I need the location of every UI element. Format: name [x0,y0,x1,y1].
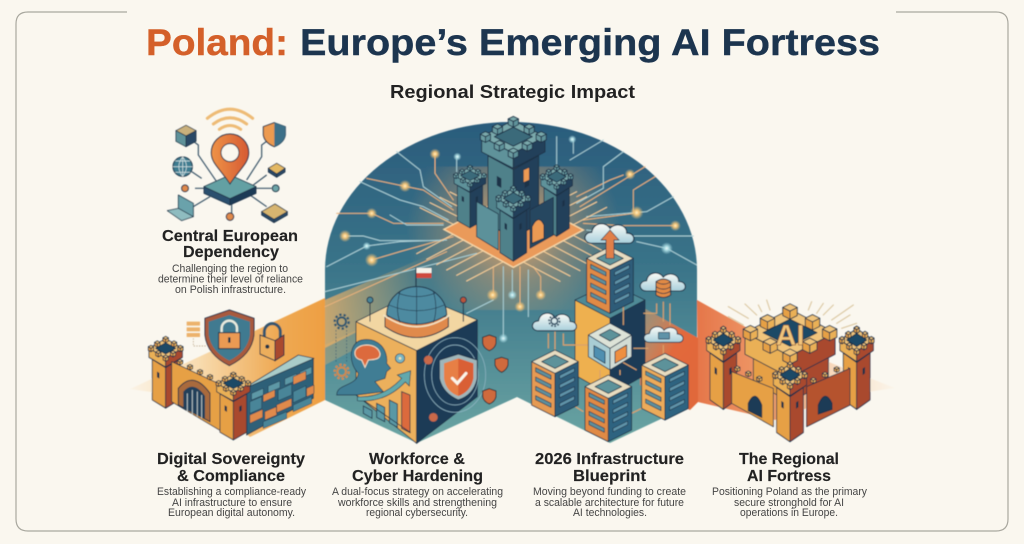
regional AI fortress [706,300,874,442]
rear pedestal [575,283,645,395]
text: Digital Sovereignty & Compliance: Digital Sovereignty [157,451,305,468]
shield with check [439,354,477,400]
rays [728,300,857,328]
workforce and cyber hardening cube [335,287,508,443]
text: The Regional AI Fortress: operations in Europe. [740,507,838,519]
text: Central European Dependency: Dependency [183,244,279,261]
text: Central European Dependency [158,228,303,296]
gate arches [748,396,762,417]
laptop [167,195,193,221]
chip node [268,163,285,177]
top server [587,247,633,313]
text: 2026 Infrastructure Blueprint [533,451,686,519]
icon: blue fortress [454,116,573,261]
text: Digital Sovereignty & Compliance: Establishing a compliance-ready [157,486,307,498]
text: Central European Dependency: Central European [162,228,298,245]
icon: location pin [211,134,249,184]
central dependency network icon [167,109,287,223]
processor chip [588,323,632,370]
text: Digital Sovereignty & Compliance [157,451,307,519]
dotted connector [193,338,206,346]
text: Central European Dependency: Challenging the region to [172,263,288,275]
circuit traces and castle [325,116,697,343]
text: Central European Dependency: on Polish infrastructure. [175,284,286,296]
brain [355,345,380,367]
small nodes [182,185,279,220]
shield node [263,123,285,147]
text: The Regional AI Fortress: The Regional [739,451,839,468]
text: 2026 Infrastructure Blueprint: a scalable architecture for future [535,497,684,509]
text: Digital Sovereignty & Compliance: & Compliance [177,468,285,485]
infrastructure blueprint stack [532,224,688,442]
curtain walls [732,372,773,427]
text: Digital Sovereignty & Compliance: AI infrastructure to ensure [172,497,292,509]
central dome panel [325,122,698,443]
gears [335,315,349,379]
text: Workforce & Cyber Hardening: Cyber Hardening [352,468,483,485]
text: 2026 Infrastructure Blueprint: Blueprint [573,468,646,485]
text: The Regional AI Fortress: Positioning Poland as the primary [712,486,868,498]
cube faces [356,293,477,443]
network lines [192,140,272,213]
glow under castle [325,167,697,310]
light rays from the diamond [417,192,610,281]
illustration [130,109,895,443]
text: Central European Dependency: determine their level of reliance [158,274,303,286]
globe node [173,157,192,176]
text: Workforce & Cyber Hardening: workforce skills and strengthening [337,497,497,509]
head silhouette [337,339,391,395]
signal arcs [207,109,253,129]
antennas [367,297,466,322]
icon: Poland flag [416,268,432,290]
trace nodes [339,135,681,343]
right orange band [697,300,895,420]
text: Digital Sovereignty & Compliance: European digital autonomy. [168,507,295,519]
diamond base [444,193,583,267]
text: Workforce & Cyber Hardening: A dual-focus strategy on accelerating [332,486,503,498]
text: Workforce & Cyber Hardening: regional cybersecurity. [366,507,468,519]
hub [204,175,256,205]
subtitle: Regional Strategic Impact [390,82,635,102]
text: 2026 Infrastructure Blueprint: AI technologies. [573,507,647,519]
data stack [187,322,200,337]
text: The Regional AI Fortress [712,451,868,519]
title: Europe’s Emerging AI Fortress [300,22,880,63]
small shields and threats [424,335,508,422]
padlock [260,324,284,361]
brick wall [247,355,314,435]
circuit traces [325,137,697,337]
icon: database cloud [640,273,685,297]
title: Poland: [146,22,288,63]
icon: gear cloud [532,313,577,331]
bar chart [356,392,411,433]
left orange band [130,298,325,437]
gate castle, shield, lock and brick wall [148,310,314,440]
keep body [753,340,790,403]
cube node [176,125,196,147]
growth arrow [357,371,411,401]
AI emblem: AI [776,320,804,352]
security rings [424,338,486,412]
text: 2026 Infrastructure Blueprint: 2026 Infrastructure [535,451,684,468]
icon: storage cloud [644,327,683,342]
text: Workforce & Cyber Hardening [332,451,503,519]
connecting lines [548,302,670,413]
text: 2026 Infrastructure Blueprint: Moving beyond funding to create [533,486,686,498]
text: Workforce & Cyber Hardening: Workforce & [369,451,465,468]
observatory dome [383,287,450,337]
tablet [262,204,287,223]
shield with lock [205,310,254,366]
servers [532,350,578,417]
text: The Regional AI Fortress: secure stronghold for AI [734,497,844,509]
icon: top cloud with upload arrow [585,224,634,258]
gate wall [148,336,251,440]
text: The Regional AI Fortress: AI Fortress [747,468,831,485]
idea bulb [395,354,405,363]
